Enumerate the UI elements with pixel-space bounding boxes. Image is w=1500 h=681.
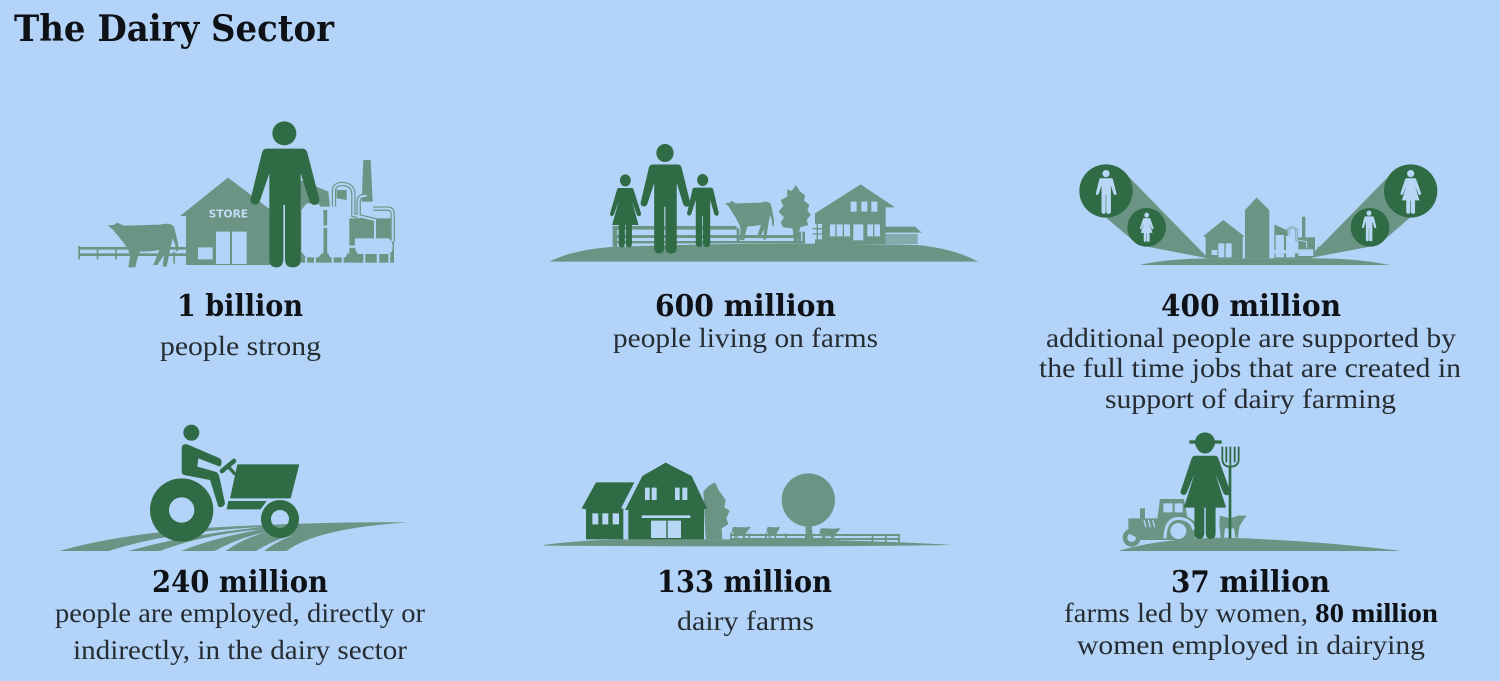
label: farms led by women [1064, 598, 1438, 660]
panel: 1 billion [78, 121, 394, 361]
label: additional people supported: support of dairy farming [1105, 384, 1396, 414]
label: people strong: people strong [160, 331, 321, 361]
label: additional people supported: additional people are supported by [1046, 323, 1457, 353]
label: additional people supported [1039, 323, 1462, 414]
label: farms led by women: women employed in dairying [1077, 630, 1425, 660]
stat: 133 million: 133 million [657, 565, 832, 600]
label: people employed: people are employed, directly or [55, 598, 425, 628]
panel: 240 million [55, 425, 425, 665]
label: people employed: indirectly, in the dairy sector [73, 635, 407, 665]
panel: 37 million [1064, 432, 1438, 660]
icon: person, store, cow and factory: STORE [209, 208, 248, 221]
icon: people supported by farm jobs [1079, 164, 1437, 265]
label: dairy farms: dairy farms [677, 606, 814, 636]
title: The Dairy Sector [14, 8, 335, 50]
stat: 240 million: 240 million [152, 565, 328, 600]
icon: family and farmhouse [549, 144, 978, 262]
stat: 400 million: 400 million [1161, 289, 1341, 324]
label: people living on farms: people living on farms [613, 323, 878, 353]
icon: woman farmer with tractor and calf [1118, 432, 1402, 551]
stat: 600 million: 600 million [655, 289, 836, 324]
label: people employed [55, 598, 425, 665]
panel: 133 million [543, 463, 952, 636]
icon: person, store, cow and factory [78, 121, 394, 267]
stat: 1 billion: 1 billion [177, 289, 303, 324]
icon: person on tractor [59, 425, 408, 552]
panel: 400 million [1039, 164, 1462, 414]
panel: 600 million [549, 144, 978, 353]
stat: 37 million: 37 million [1171, 565, 1330, 600]
icon: barn, tree and cows [543, 463, 952, 546]
label: additional people supported: the full time jobs that are created in [1039, 353, 1462, 383]
label: farms led by women: farms led by women, 80 million [1064, 598, 1438, 628]
